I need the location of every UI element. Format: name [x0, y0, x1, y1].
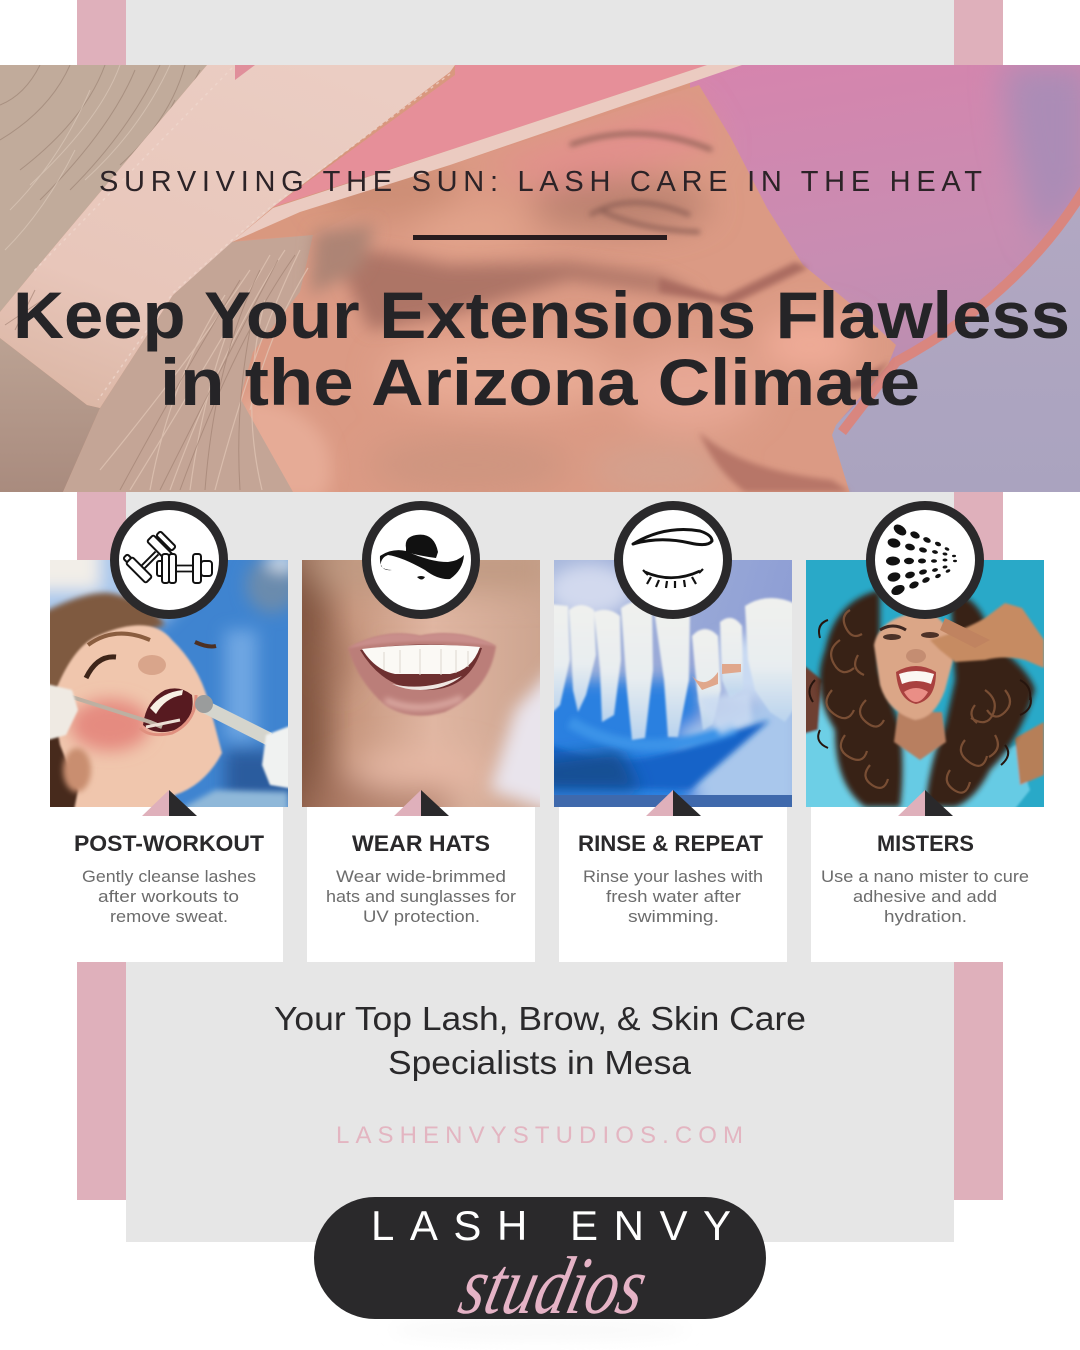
- card text: remove sweat.: [110, 907, 228, 926]
- face and neck: [874, 612, 953, 760]
- card 2: wear hats: [326, 506, 516, 926]
- icon: wide-brimmed hat: [366, 506, 476, 614]
- logo: lash envy studios: [314, 1197, 766, 1332]
- pointer triangle: [646, 790, 701, 816]
- card text: [821, 867, 1029, 926]
- panel: hero banner: [0, 65, 1080, 500]
- photo: dental patient: [50, 560, 288, 807]
- page background: grey panel: [126, 0, 954, 1242]
- card text: after workouts to: [98, 887, 239, 906]
- card text: Use a nano mister to cure: [821, 867, 1029, 886]
- card heading: POST-WORKOUT: [74, 831, 265, 856]
- tagline: Your Top Lash, Brow, & Skin Care: [274, 1000, 806, 1037]
- card text: [583, 867, 763, 926]
- card text: UV protection.: [363, 907, 480, 926]
- card heading: RINSE & REPEAT: [578, 831, 764, 856]
- card text: [326, 867, 516, 926]
- card heading: MISTERS: [877, 831, 974, 856]
- upper hair: [0, 65, 207, 312]
- main title: in the Arizona Climate: [160, 345, 920, 419]
- card 1: post-workout: [74, 506, 265, 926]
- icon: eyebrow and closed eye: [618, 506, 728, 614]
- subtitle: SURVIVING THE SUN: LASH CARE IN THE HEAT: [99, 166, 982, 198]
- icon: spray mist: [870, 506, 980, 614]
- main title: Keep Your Extensions Flawless: [13, 278, 1070, 352]
- hero photo: [0, 65, 1080, 500]
- card text: hats and sunglasses for: [326, 887, 516, 906]
- card 3: rinse and repeat: [578, 506, 764, 926]
- lower hair: [63, 225, 375, 492]
- icon: dumbbells: [114, 506, 224, 614]
- card text: Wear wide-brimmed: [336, 867, 506, 886]
- pink visor brim: [273, 65, 707, 207]
- pointer triangle: [898, 790, 953, 816]
- photo: curly-haired woman: [800, 560, 1044, 815]
- pointer triangle: [394, 790, 449, 816]
- face: [240, 85, 896, 500]
- tagline: Specialists in Mesa: [388, 1044, 692, 1081]
- tagline: [274, 1000, 806, 1081]
- curly hair mass: [809, 590, 1035, 807]
- logo shadow: [390, 1321, 690, 1339]
- pointer triangle: [142, 790, 197, 816]
- divider line: [413, 235, 667, 240]
- website url: LASHENVYSTUDIOS.COM: [336, 1122, 743, 1149]
- card text: hydration.: [884, 907, 967, 926]
- card text: swimming.: [628, 907, 719, 926]
- card text: Gently cleanse lashes: [82, 867, 256, 886]
- ear: [244, 400, 332, 492]
- visor lens background: [690, 65, 1080, 492]
- logo: lash envy studios: LASH ENVY: [371, 1202, 731, 1249]
- card heading: WEAR HATS: [352, 831, 490, 856]
- visor strap: [0, 65, 455, 408]
- logo: lash envy studios: studios: [451, 1241, 656, 1332]
- photo: dental model: [540, 560, 800, 810]
- tan lower-left area: [0, 338, 100, 492]
- raised hand: [930, 603, 1044, 668]
- card text: fresh water after: [606, 887, 741, 906]
- panel: tip cards backgrounds: [55, 807, 1039, 962]
- card text: adhesive and add: [853, 887, 997, 906]
- card text: Rinse your lashes with: [583, 867, 763, 886]
- card text: [82, 867, 256, 926]
- main title: [13, 278, 1070, 419]
- page background: pink side bars: [77, 0, 1003, 1200]
- photo: smiling mouth: [302, 560, 540, 807]
- card 4: misters: [821, 506, 1029, 926]
